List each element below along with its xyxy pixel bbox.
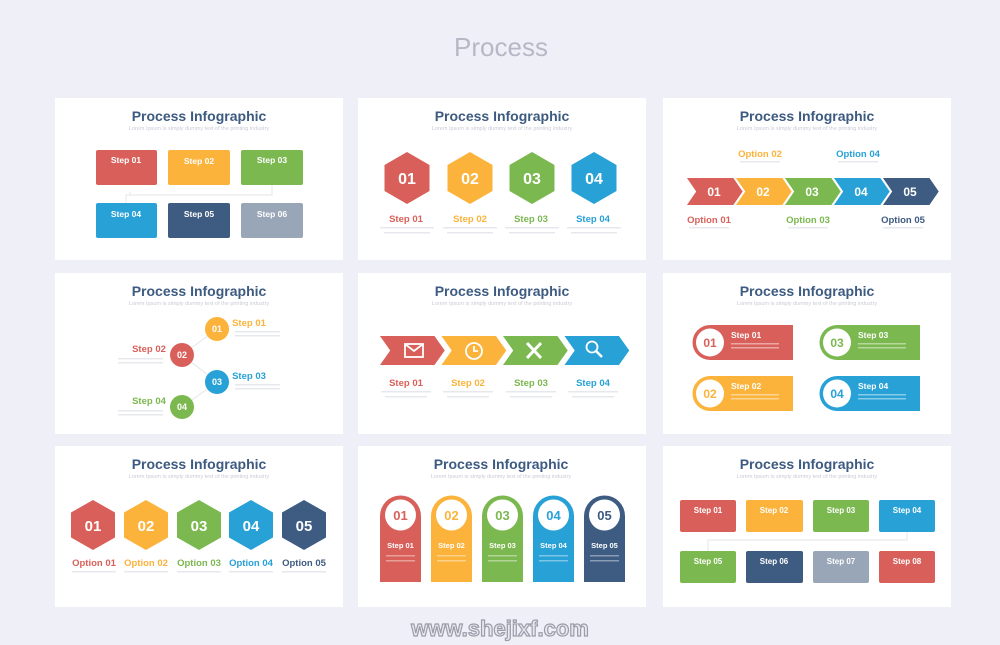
panel 1: six step boxes: Process Infographic: [132, 108, 267, 124]
panel 3: chevron options: Process Infographic: [740, 108, 875, 124]
panel 4: zigzag circles: 02: [177, 350, 187, 360]
panel 5: arrow icons: [358, 273, 646, 434]
panel 9: eight step boxes: Step 05: [694, 557, 723, 566]
panel 6: pill steps: Lorem Ipsum is simply dummy text of the printing industry: [737, 301, 877, 307]
panel 3: chevron options: Option 02: [738, 149, 782, 160]
panel 4: zigzag circles: Step 04: [132, 396, 167, 407]
panel 1: six step boxes: Step 04: [111, 209, 141, 219]
panel 7: five hexagon options: 01: [85, 518, 101, 535]
panel 5: arrow icons: Step 03: [514, 378, 548, 389]
panel 2: hexagon steps: 03: [523, 171, 541, 188]
panel 3: chevron options: 02: [756, 185, 770, 199]
panel 6: pill steps: Step 03: [858, 330, 889, 340]
panel 8: tombstone steps: [358, 446, 646, 607]
panel 1: six step boxes: Lorem Ipsum is simply dummy text of the printing industry: [129, 126, 269, 132]
panel 3: chevron options: Option 04: [836, 149, 881, 160]
panel 7: five hexagon options: Option 02: [124, 558, 168, 569]
panel 2: hexagon steps: 01: [398, 171, 416, 188]
panel 3: chevron options: 05: [903, 185, 917, 199]
panel 3: chevron options: [663, 98, 951, 260]
panel 3: chevron options: 01: [707, 185, 721, 199]
panel 4: zigzag circles: [55, 273, 343, 434]
panel 2: hexagon steps: Step 01: [389, 214, 424, 225]
panel 4: zigzag circles: 03: [212, 377, 222, 387]
panel 1: six step boxes: Step 01: [111, 155, 141, 165]
panel 4: zigzag circles: 01: [212, 324, 222, 334]
panel 6: pill steps: Step 04: [858, 381, 889, 391]
watermark: www.shejixf.com: [410, 616, 589, 641]
panel 6: pill steps: Process Infographic: [740, 283, 875, 299]
panel 9: eight step boxes: Step 01: [694, 506, 723, 515]
panel 7: five hexagon options: Option 05: [282, 558, 327, 569]
panel 7: five hexagon options: Option 04: [229, 558, 274, 569]
panel 7: five hexagon options: Lorem Ipsum is simply dummy text of the printing industry: [129, 474, 269, 480]
panel 4: zigzag circles: Step 03: [232, 371, 266, 382]
panel 8: tombstone steps: 03: [495, 508, 510, 523]
panel 7: five hexagon options: 02: [138, 518, 154, 535]
panel 9: eight step boxes: Step 07: [827, 557, 856, 566]
panel 9: eight step boxes: Step 03: [827, 506, 856, 515]
panel 3: chevron options: Lorem Ipsum is simply dummy text of the printing industry: [737, 126, 877, 132]
panel 6: pill steps: 04: [830, 387, 844, 401]
panel 8: tombstone steps: Lorem Ipsum is simply dummy text of the printing industry: [431, 474, 571, 480]
panel 9: eight step boxes: [663, 446, 951, 607]
panel 8: tombstone steps: 01: [393, 508, 408, 523]
panel 9: eight step boxes: Step 08: [893, 557, 922, 566]
panel 8: tombstone steps: Step 04: [540, 541, 568, 550]
panel 7: five hexagon options: [55, 446, 343, 607]
panel 4: zigzag circles: Lorem Ipsum is simply dummy text of the printing industry: [129, 301, 269, 307]
panel 5: arrow icons: Process Infographic: [435, 283, 570, 299]
panel 3: chevron options: 03: [805, 185, 819, 199]
panel 6: pill steps: [663, 273, 951, 434]
panel 9: eight step boxes: Lorem Ipsum is simply dummy text of the printing industry: [737, 474, 877, 480]
panel 2: hexagon steps: [358, 98, 646, 260]
panel 3: chevron options: Option 05: [881, 215, 926, 226]
panel 7: five hexagon options: Process Infographic: [132, 456, 267, 472]
panel 1: six step boxes: [55, 98, 343, 260]
panel 8: tombstone steps: Step 02: [438, 541, 465, 550]
panel 2: hexagon steps: Process Infographic: [435, 108, 570, 124]
panel 6: pill steps: 03: [830, 336, 844, 350]
panel 2: hexagon steps: Step 02: [453, 214, 487, 225]
panel 7: five hexagon options: 04: [243, 518, 260, 535]
panel 4: zigzag circles: Process Infographic: [132, 283, 267, 299]
panel 6: pill steps: Step 02: [731, 381, 762, 391]
panel 1: six step boxes: Step 05: [184, 209, 214, 219]
panel 3: chevron options: Option 01: [687, 215, 732, 226]
panel 9: eight step boxes: Step 04: [893, 506, 922, 515]
panel 8: tombstone steps: Process Infographic: [434, 456, 569, 472]
panel 7: five hexagon options: Option 03: [177, 558, 221, 569]
panel 7: five hexagon options: 03: [191, 518, 207, 535]
panel 8: tombstone steps: Step 05: [591, 541, 618, 550]
panel 2: hexagon steps: Step 04: [576, 214, 611, 225]
panel 1: six step boxes: Step 03: [257, 155, 287, 165]
panel 8: tombstone steps: 04: [546, 508, 561, 523]
panel 8: tombstone steps: 05: [597, 508, 612, 523]
panel 8: tombstone steps: Step 01: [387, 541, 414, 550]
panel 2: hexagon steps: Lorem Ipsum is simply dummy text of the printing industry: [432, 126, 572, 132]
panel 6: pill steps: Step 01: [731, 330, 762, 340]
panel 2: hexagon steps: 02: [461, 171, 479, 188]
panel 1: six step boxes: Step 02: [184, 156, 214, 166]
panel 2: hexagon steps: Step 03: [514, 214, 548, 225]
panel 7: five hexagon options: 05: [296, 518, 312, 535]
panel 1: six step boxes: Step 06: [257, 209, 287, 219]
panel 3: chevron options: 04: [854, 185, 868, 199]
panel 9: eight step boxes: Step 02: [760, 506, 789, 515]
panel 5: arrow icons: Step 04: [576, 378, 611, 389]
panel 5: arrow icons: Lorem Ipsum is simply dummy text of the printing industry: [432, 301, 572, 307]
panel 5: arrow icons: Step 01: [389, 378, 424, 389]
panel 6: pill steps: 02: [703, 387, 717, 401]
panel 2: hexagon steps: 04: [585, 171, 603, 188]
panel 5: arrow icons: Step 02: [451, 378, 485, 389]
panel 4: zigzag circles: Step 02: [132, 344, 166, 355]
panel 6: pill steps: 01: [703, 336, 717, 350]
panel 8: tombstone steps: 02: [444, 508, 459, 523]
panel 4: zigzag circles: 04: [177, 402, 187, 412]
panel 9: eight step boxes: Process Infographic: [740, 456, 875, 472]
panel 7: five hexagon options: Option 01: [72, 558, 117, 569]
page title: Process: [454, 32, 548, 62]
panel 8: tombstone steps: Step 03: [489, 541, 516, 550]
panel 3: chevron options: Option 03: [786, 215, 830, 226]
panel 4: zigzag circles: Step 01: [232, 318, 267, 329]
panel 9: eight step boxes: Step 06: [760, 557, 789, 566]
